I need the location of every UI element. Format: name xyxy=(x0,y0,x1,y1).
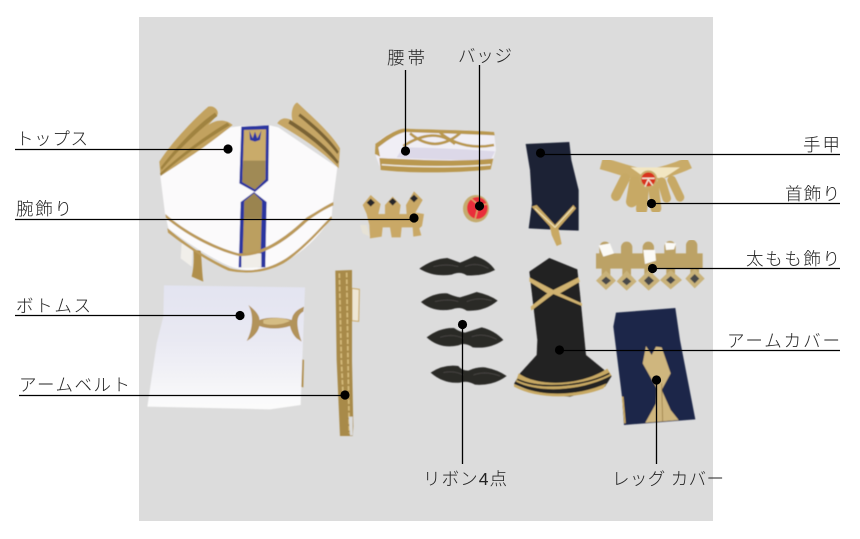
label: 腰帯: 腰帯 xyxy=(387,48,425,68)
label: バッジ xyxy=(458,46,512,211)
label: 腰帯 xyxy=(387,48,425,156)
garment: waist belt xyxy=(375,129,496,172)
garment: gauntlet xyxy=(526,142,579,246)
label: リボン4点: リボン4点 xyxy=(423,469,507,489)
garment: ribbons 4 pieces xyxy=(419,256,507,385)
label: 腕飾り: 腕飾り xyxy=(16,199,72,219)
garment: arm ornament xyxy=(360,191,424,238)
label: レッグ カバー xyxy=(612,375,724,489)
label: 太もも飾り xyxy=(648,249,840,273)
label: トップス: トップス xyxy=(16,129,88,149)
label: 首飾り: 首飾り xyxy=(785,184,840,204)
label: レッグ カバー: レッグ カバー xyxy=(612,469,724,489)
garment: arm belt xyxy=(335,270,359,436)
garment: bottoms skirt xyxy=(147,285,305,409)
garment: arm cover xyxy=(514,258,612,397)
label: 手甲: 手甲 xyxy=(803,135,840,155)
label: 首飾り xyxy=(647,184,840,208)
label: バッジ: バッジ xyxy=(458,46,512,66)
label: アームベルト xyxy=(19,375,350,400)
garment: leg cover xyxy=(613,308,695,425)
label: アームカバー: アームカバー xyxy=(727,331,840,351)
panel: grey photo background xyxy=(139,17,713,521)
label: 腕飾り xyxy=(15,199,419,223)
garment: necklace xyxy=(601,163,689,209)
label: 手甲 xyxy=(536,135,840,158)
garment: thigh ornament xyxy=(596,243,705,291)
garment: badge xyxy=(463,195,489,222)
label: ボトムス xyxy=(15,296,245,320)
label: アームベルト: アームベルト xyxy=(19,375,130,395)
label: ボトムス: ボトムス xyxy=(16,296,91,316)
label: 太もも飾り: 太もも飾り xyxy=(746,249,840,269)
garment: tops xyxy=(159,103,340,282)
label: リボン4点 xyxy=(423,320,507,489)
label: トップス xyxy=(15,129,233,154)
label: アームカバー xyxy=(555,331,840,355)
